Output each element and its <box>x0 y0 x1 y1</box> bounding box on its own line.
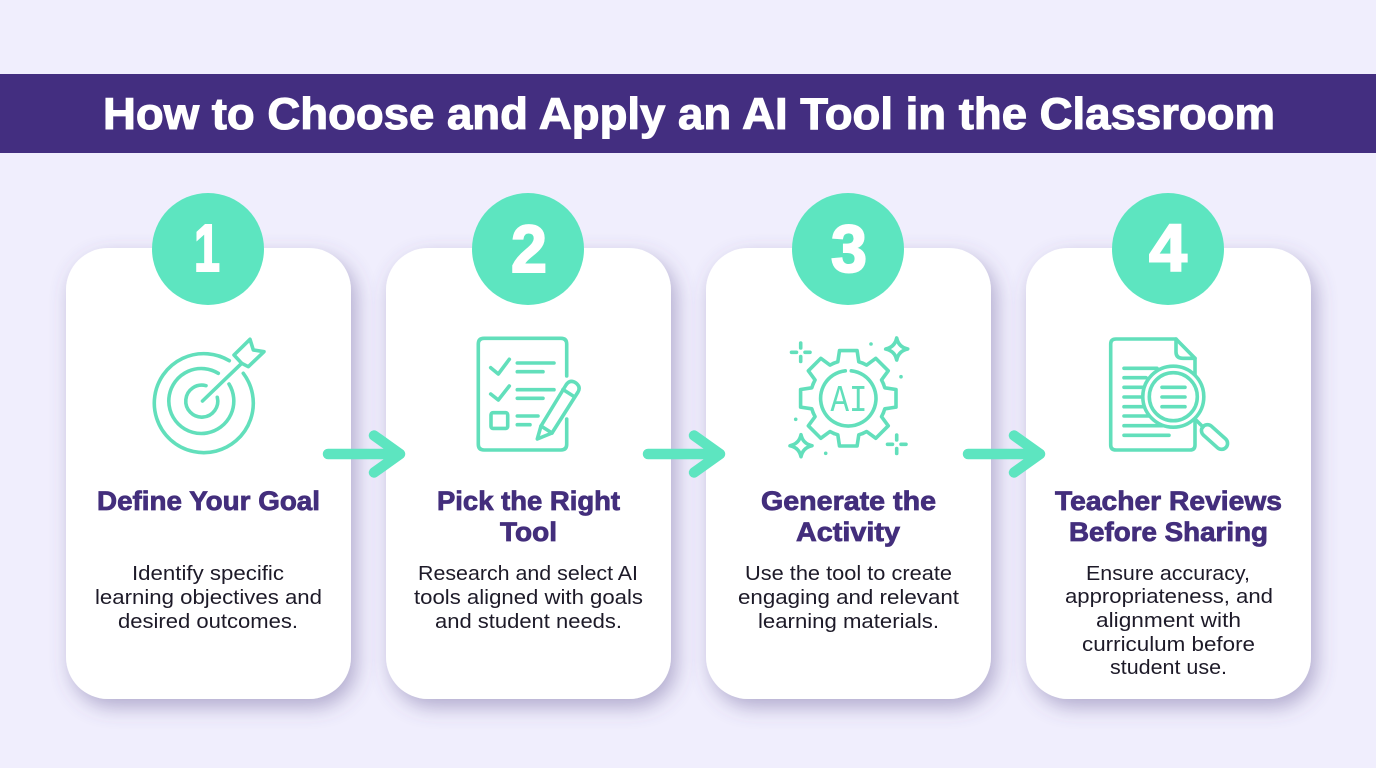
title: How to Choose and Apply an AI Tool in the Classroom <box>103 90 1275 139</box>
heading <box>437 486 620 547</box>
number badge 1: 1 <box>194 211 220 286</box>
description <box>1065 562 1273 679</box>
icon: checklist and pencil <box>478 338 579 450</box>
description: tools aligned with goals <box>414 586 643 609</box>
icon: AI gear with sparkles <box>790 338 908 457</box>
description: appropriateness, and <box>1065 585 1273 608</box>
title banner <box>0 74 1376 153</box>
heading: Generate the <box>761 486 936 516</box>
heading <box>1055 486 1282 547</box>
arrow: step 3 to 4 <box>968 436 1040 472</box>
description: student use. <box>1110 656 1227 679</box>
description: alignment with <box>1096 609 1241 632</box>
number badge 3 <box>792 193 904 305</box>
description: Ensure accuracy, <box>1086 562 1250 585</box>
description: Research and select AI <box>418 562 638 585</box>
description: learning materials. <box>758 610 939 633</box>
heading: Before Sharing <box>1069 517 1268 547</box>
panel: step 1 <box>66 193 351 699</box>
arrow: step 2 to 3 <box>648 436 720 472</box>
heading: Teacher Reviews <box>1055 486 1282 516</box>
number badge 4 <box>1112 193 1224 305</box>
description: desired outcomes. <box>118 610 298 633</box>
icon text: AI: AI <box>830 380 868 423</box>
heading: Activity <box>796 517 900 547</box>
description <box>95 562 322 633</box>
panel: step 3 <box>706 193 991 699</box>
description: curriculum before <box>1082 633 1255 656</box>
description: engaging and relevant <box>738 586 959 609</box>
description: Use the tool to create <box>745 562 952 585</box>
heading <box>761 486 936 547</box>
number badge 3: 3 <box>831 212 867 287</box>
icon: target with arrow <box>154 339 264 453</box>
heading: Pick the Right <box>437 486 620 516</box>
number badge 2: 2 <box>511 212 547 287</box>
description: Identify specific <box>132 562 284 585</box>
heading: Tool <box>500 517 557 547</box>
panel: step 2 <box>386 193 671 699</box>
description <box>414 562 643 633</box>
icon: document and magnifier <box>1111 339 1230 452</box>
number badge 1 <box>152 193 264 305</box>
number badge 4: 4 <box>1149 211 1187 286</box>
heading: Define Your Goal <box>97 486 320 516</box>
description: and student needs. <box>435 610 622 633</box>
panel: step 4 <box>1026 193 1311 699</box>
description <box>738 562 959 633</box>
number badge 2 <box>472 193 584 305</box>
arrow: step 1 to 2 <box>328 436 400 472</box>
description: learning objectives and <box>95 586 322 609</box>
